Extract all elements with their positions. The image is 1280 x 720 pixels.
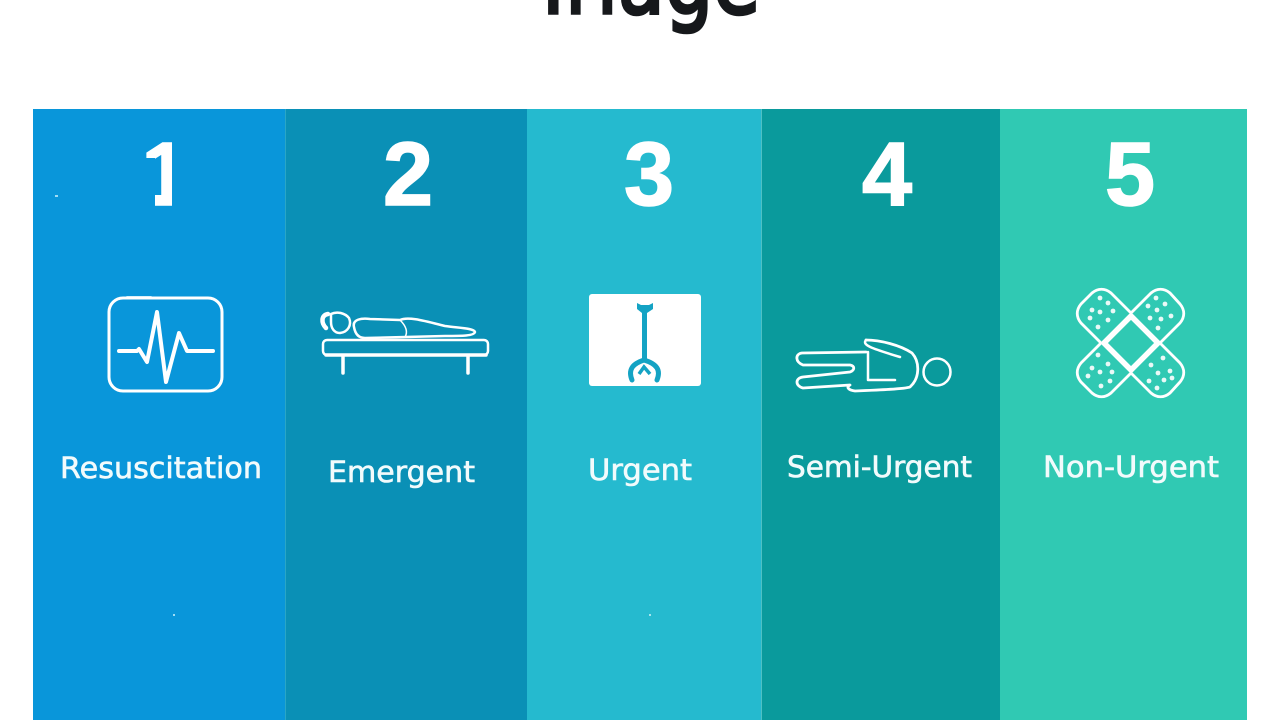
number 1: 1	[141, 125, 191, 225]
number 5: 5	[1105, 125, 1155, 225]
label: Urgent	[588, 453, 692, 487]
label: Emergent	[328, 455, 475, 489]
panel: level 5 non-urgent	[1000, 109, 1247, 720]
label: Resuscitation	[60, 451, 262, 485]
icon: x-ray card	[589, 294, 701, 386]
label: Semi-Urgent	[787, 450, 972, 484]
label: Non-Urgent	[1043, 450, 1219, 484]
panel: level 4 semi-urgent	[761, 109, 1000, 720]
icon: heart monitor	[109, 297, 222, 391]
panel: level 3 urgent	[527, 109, 761, 720]
number 2: 2	[383, 125, 433, 225]
icon: crossed bandages	[1077, 289, 1184, 397]
icon: lying figure	[797, 340, 950, 391]
icon: patient on bed	[322, 313, 488, 373]
number 3: 3	[624, 125, 674, 225]
panel: level 1 resuscitation	[33, 109, 285, 720]
panel: level 2 emergent	[285, 109, 527, 720]
number 4: 4	[862, 125, 912, 225]
